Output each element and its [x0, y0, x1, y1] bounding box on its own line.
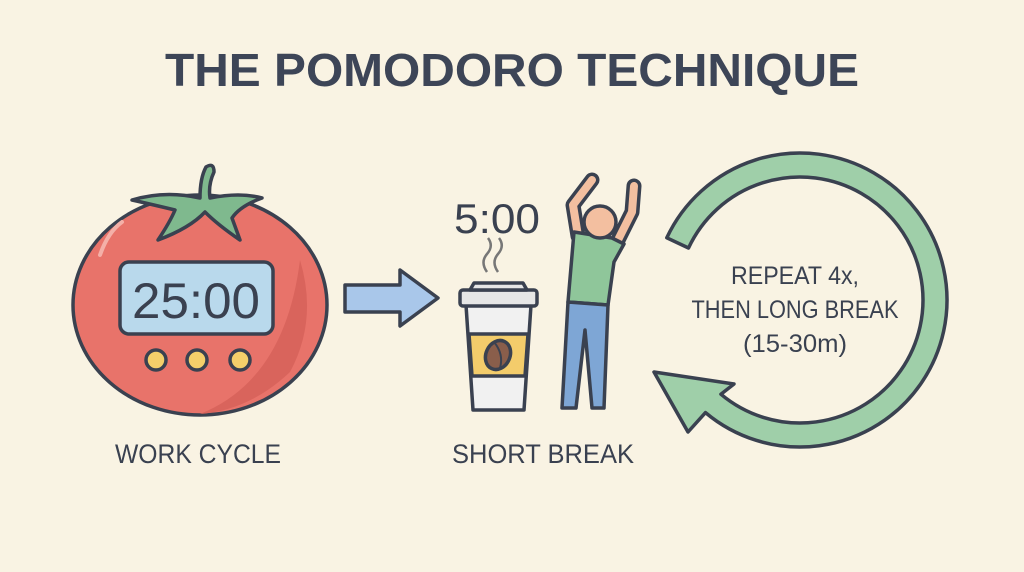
icon: tomato timer — [73, 165, 327, 415]
timer text: 5:00: 5:00 — [454, 195, 540, 242]
text: repeat — [692, 262, 899, 358]
icon: coffee cup — [460, 238, 537, 410]
text: repeat: THEN LONG BREAK — [692, 296, 899, 324]
display — [120, 262, 273, 334]
label: short break: SHORT BREAK — [452, 439, 634, 469]
buttons — [146, 350, 166, 370]
label: work cycle: WORK CYCLE — [115, 439, 281, 469]
text: repeat: (15-30m) — [743, 330, 847, 358]
icon: stretching person — [562, 180, 634, 408]
icon: cycle arrow — [654, 153, 947, 447]
icon: tomato timer: 25:00 — [132, 273, 260, 329]
title: THE POMODORO TECHNIQUE — [165, 44, 859, 96]
arrow: right — [345, 270, 438, 326]
text: repeat: REPEAT 4x, — [731, 262, 859, 290]
leaves — [132, 165, 262, 240]
